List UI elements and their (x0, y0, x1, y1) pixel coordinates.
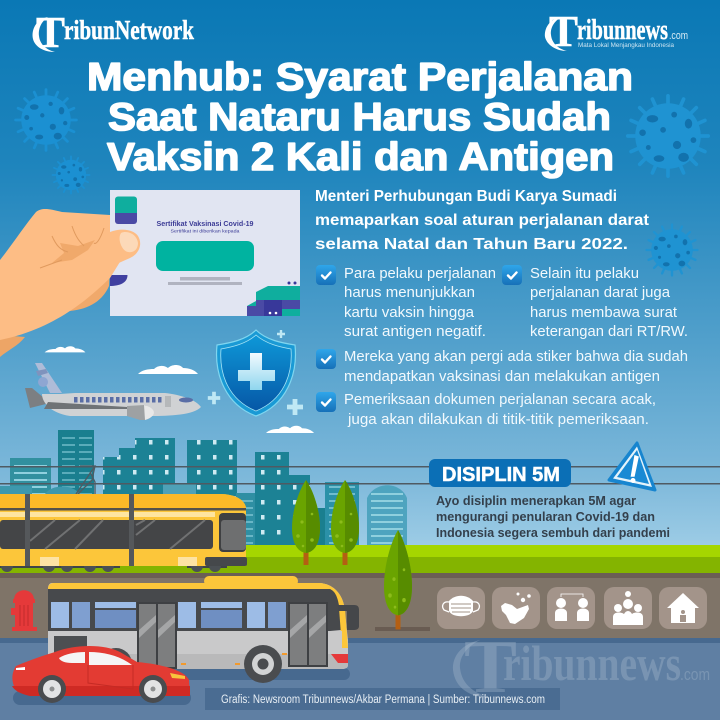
title (87, 56, 633, 179)
cloud right (266, 426, 314, 433)
logo: Tribun Network: T (36, 8, 65, 57)
disiplin text: mengurangi penularan Covid-19 dan (436, 509, 655, 524)
bullet: pemeriksaan (316, 392, 656, 428)
virus decoration right large (628, 96, 708, 176)
road (0, 638, 720, 720)
title: Menhub: Syarat Perjalanan (87, 56, 633, 99)
intro text: selama Natal dan Tahun Baru 2022. (315, 236, 628, 253)
watermark Tribunnews: .com (680, 665, 710, 684)
vaccine certificate card: Sertifikat ini diberikan kepada (170, 228, 240, 234)
tree left (292, 480, 320, 565)
power lines (0, 466, 720, 484)
disiplin text: Ayo disiplin menerapkan 5M agar (436, 493, 636, 508)
cloud middle (138, 365, 198, 374)
title: Vaksin 2 Kali dan Antigen (107, 136, 614, 179)
intro text (315, 188, 650, 253)
disiplin text: Indonesia segera sembuh dari pandemi (436, 525, 670, 540)
icon: physical distance (547, 587, 595, 629)
bullet: pemeriksaan: Pemeriksaan dokumen perjalanan secara acak, (344, 392, 656, 408)
bullet: surat RT/RW: keterangan dari RT/RW. (530, 324, 688, 340)
logo: Tribunnews: ribunnews (577, 14, 668, 46)
bullet: stiker: Mereka yang akan pergi ada stiker bahwa dia sudah (344, 349, 688, 365)
logo: Tribunnews: .com (669, 30, 688, 42)
cloud left (45, 346, 85, 352)
shield icon (217, 330, 295, 416)
virus decoration right small (647, 225, 697, 275)
plus icons (208, 330, 303, 415)
bullet: surat RT/RW: Selain itu pelaku (530, 266, 639, 282)
icon: stay home (659, 587, 707, 629)
bullet: kartu vaksin (316, 265, 496, 340)
bullet: surat RT/RW: perjalanan darat juga (530, 285, 671, 301)
bus (45, 576, 359, 683)
logo: Tribunnews (545, 7, 688, 56)
icon: avoid crowd (604, 587, 652, 629)
virus decoration left large (16, 90, 76, 150)
warning icon (609, 443, 655, 490)
bullet: surat RT/RW: harus membawa surat (530, 305, 677, 321)
ground and sidewalk (0, 573, 720, 638)
hand holding card (0, 209, 140, 357)
icon: washing hands (492, 587, 540, 629)
bullet: pemeriksaan: juga akan dilakukan di titik-titik pemeriksaan. (347, 412, 649, 428)
airplane (25, 363, 201, 420)
disiplin 5M badge (429, 459, 571, 487)
bullet: stiker (316, 349, 688, 385)
watermark Tribunnews: T (464, 625, 517, 709)
bullet: kartu vaksin: kartu vaksin hingga (344, 305, 475, 321)
bullet: surat RT/RW (502, 265, 688, 340)
disiplin 5M badge: DISIPLIN 5M (442, 464, 560, 486)
credit bar (205, 688, 560, 710)
credit bar: Grafis: Newsroom Tribunnews/Akbar Permana | Sumber: Tribunnews.com (221, 694, 545, 706)
bullet: kartu vaksin: surat antigen negatif. (344, 324, 486, 340)
logo: Tribun Network: ribunNetwork (64, 15, 194, 45)
bullet: stiker: mendapatkan vaksinasi dan melakukan antigen (344, 369, 660, 385)
intro text: memaparkan soal aturan perjalanan darat (315, 212, 650, 229)
tram (0, 466, 247, 572)
logo: Tribunnews: Mata Lokal Menjangkau Indonesia (578, 42, 674, 49)
fire hydrant (11, 590, 37, 631)
disiplin text (436, 493, 670, 540)
tree middle (331, 480, 359, 565)
intro text: Menteri Perhubungan Budi Karya Sumadi (315, 188, 617, 205)
city skyline (0, 430, 407, 546)
virus decoration left small (52, 156, 90, 194)
grass (0, 545, 720, 557)
red car (12, 646, 191, 705)
vaccine certificate card: Sertifikat Vaksinasi Covid-19 (156, 219, 254, 228)
bullet: kartu vaksin: harus menunjukkan (344, 285, 475, 301)
logo: Tribunnews: T (549, 7, 578, 56)
tree right with base (375, 530, 430, 631)
icon: mask (437, 587, 485, 629)
background sky (0, 0, 720, 560)
logo: Tribun Network (33, 8, 194, 57)
watermark Tribunnews (453, 625, 710, 709)
bullet: kartu vaksin: Para pelaku perjalanan (344, 266, 496, 282)
title: Saat Nataru Harus Sudah (108, 96, 611, 139)
vaccine certificate card (110, 190, 300, 316)
